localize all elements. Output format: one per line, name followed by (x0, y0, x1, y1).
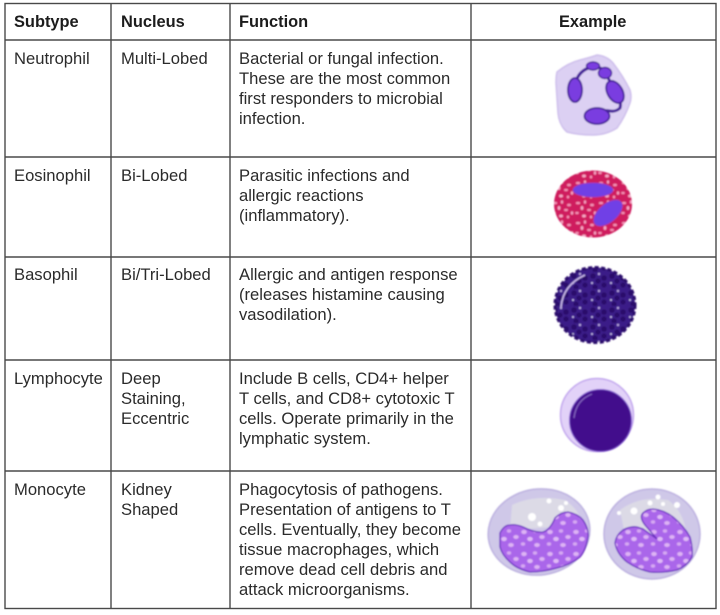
row: neutrophil text (14, 49, 450, 128)
icon: monocyte cell, left (483, 482, 595, 582)
row: lymphocyte text (14, 369, 455, 448)
row: monocyte text: tissue macrophages, which (239, 540, 439, 559)
row: neutrophil text: These are the most common (239, 69, 450, 88)
icon: neutrophil cell (556, 55, 631, 135)
row: basophil text: Allergic and antigen response (239, 265, 458, 284)
row: eosinophil text: Eosinophil (14, 166, 91, 185)
row: lymphocyte text: Deep (121, 369, 161, 388)
row: lymphocyte text: lymphatic system. (239, 429, 371, 448)
row: lymphocyte text: Include B cells, CD4+ helper (239, 369, 449, 388)
header row: Function (239, 13, 308, 31)
row: lymphocyte text: Staining, (121, 389, 186, 408)
row: neutrophil text: infection. (239, 109, 305, 128)
row: monocyte text: Monocyte (14, 480, 86, 499)
row: lymphocyte text: Eccentric (121, 409, 189, 428)
header row: Example (559, 13, 626, 31)
row: basophil text: vasodilation). (239, 305, 337, 324)
row: monocyte text (14, 480, 461, 599)
row: monocyte text: Shaped (121, 500, 178, 519)
row: basophil text: Bi/Tri-Lobed (121, 265, 211, 284)
row: neutrophil text: Bacterial or fungal infection. (239, 49, 444, 68)
row: monocyte text: attack microorganisms. (239, 580, 410, 599)
row: eosinophil text: Bi-Lobed (121, 166, 187, 185)
row: basophil text: (releases histamine causing (239, 285, 445, 304)
row: basophil text (14, 265, 458, 324)
row: neutrophil text: Neutrophil (14, 49, 90, 68)
row: monocyte text: Presentation of antigens to T (239, 500, 451, 519)
row: eosinophil text: (inflammatory). (239, 206, 350, 225)
row: basophil text: Basophil (14, 265, 78, 284)
row: neutrophil text: Multi-Lobed (121, 49, 208, 68)
row: monocyte text: Phagocytosis of pathogens. (239, 480, 443, 499)
header row (14, 13, 626, 31)
row: lymphocyte text: cells. Operate primarily in the (239, 409, 454, 428)
row: monocyte text: remove dead cell debris and (239, 560, 447, 579)
row: lymphocyte text: Lymphocyte (14, 369, 103, 388)
header row: Nucleus (121, 13, 185, 31)
row: monocyte text: cells. Eventually, they become (239, 520, 461, 539)
row: eosinophil text: allergic reactions (239, 186, 364, 205)
icon: basophil cell (555, 268, 635, 342)
row: lymphocyte text: T cells, and CD8+ cytotoxic T (239, 389, 455, 408)
row: neutrophil text: first responders to microbial (239, 89, 443, 108)
icon: lymphocyte cell (560, 378, 634, 452)
row: monocyte text: Kidney (121, 480, 172, 499)
icon: monocyte cell, right (604, 489, 700, 579)
header row: Subtype (14, 13, 79, 31)
row: eosinophil text (14, 166, 410, 225)
row: eosinophil text: Parasitic infections and (239, 166, 410, 185)
icon: eosinophil cell (554, 170, 632, 238)
